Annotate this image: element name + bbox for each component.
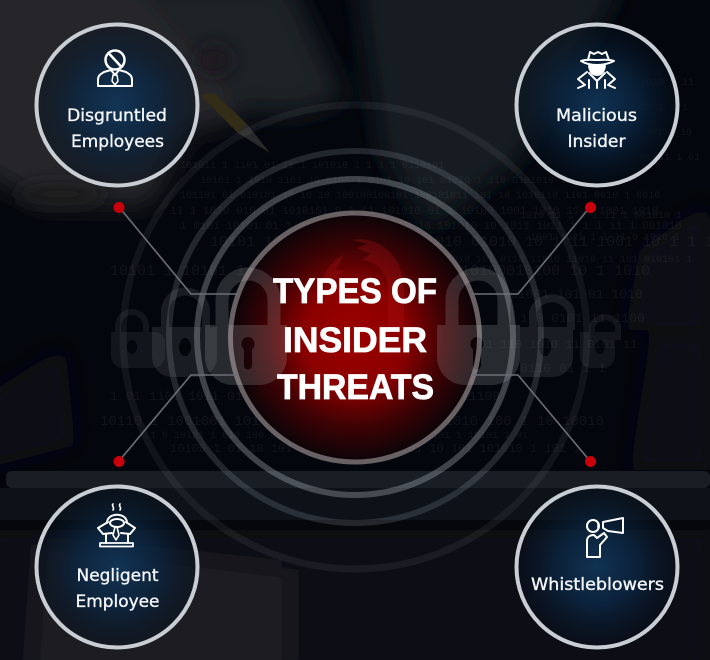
- pencil: [200, 93, 270, 153]
- label: Whistleblowers: [531, 575, 664, 595]
- padlock mid right: [520, 298, 573, 377]
- binary code texture: 1010 11 1 1 1 11 1 001010 1: [520, 211, 682, 222]
- outer padlocks: [111, 292, 618, 377]
- binary code texture: 10100 1 01 10 101 1101 1 1011010101 10 101 101010 1 101 1: [170, 442, 580, 456]
- hand: [15, 45, 232, 206]
- central red disc: [205, 213, 520, 462]
- connector end dots: [114, 202, 596, 467]
- connector lines: [119, 207, 590, 461]
- panel: whistleblowers: [516, 486, 678, 648]
- broken padlock inside disc: [322, 239, 404, 328]
- binary code texture: 0110 01 1 1: [520, 361, 606, 376]
- label: Malicious: [556, 106, 637, 126]
- binary code texture: 1 0 10101 1 010 100 010 101 010100 100 1010 1 0101 1 10101 1 01: [150, 431, 528, 442]
- padlock far right: [580, 317, 618, 368]
- binary code texture: 1 0 0101 11 1100: [520, 311, 645, 326]
- binary code texture: 10101 1 10101 1 1010 0101 1 1 1 1010 1010100010100 10 1 1010: [110, 263, 650, 280]
- label: Negligent: [76, 566, 159, 586]
- connector: whistleblowers: [472, 375, 590, 461]
- label line two: Employees: [71, 132, 164, 152]
- connector: disgruntled employees: [119, 207, 237, 294]
- padlock large right: [437, 274, 520, 385]
- label line two: Insider: [568, 132, 626, 152]
- panel: malicious insider: [516, 24, 678, 186]
- binary code texture: 10110 1 1001001 101 1001 110010 01 0101001010 100 1 10 10010: [100, 414, 604, 430]
- binary code texture: 10101 1 1010 1101 10 0101 1 0101 10 101 01010 1 110 0101010 1: [200, 176, 566, 187]
- connector: malicious insider: [472, 207, 590, 294]
- icon: person with prohibition sign: [98, 50, 132, 86]
- binary code texture: 1 0101 110 1010 11 0101 11: [450, 338, 637, 352]
- binary code texture: 11 1 1010 010 01 1010101 0 1 11 101010 01 1 10100 1001 1010 11 1 1001 1010: [170, 206, 658, 218]
- binary code texture: 01011 1 01: [640, 153, 700, 164]
- binary code texture: 1 01 1 10 10101 1010 101 0110 11010 11010 11 101 010101 1: [350, 255, 692, 266]
- binary code texture: 1 01 1100 1011 01 1 1 1 1001 10 0110101 00 1111100: [110, 389, 500, 404]
- binary code texture: 01001 101 01 1010: [510, 287, 643, 302]
- binary code texture: 0101 10: [650, 128, 692, 139]
- panel: disgruntled employees: [36, 24, 198, 186]
- binary code texture: 101011 1 1101 01 11 1 101010 1 1 1 1 0110101: [180, 161, 444, 172]
- binary code texture: 10 1 1 1: [640, 103, 688, 114]
- connector: negligent employee: [119, 375, 237, 461]
- padlock large left: [205, 274, 287, 385]
- icon: stressed worker at desk with steam: [98, 504, 135, 546]
- binary code texture: 1001 1001 1 1 11 0 1010 1: [530, 233, 680, 244]
- binary code texture: 1010 0 11: [640, 78, 694, 89]
- binary code texture: [100, 78, 710, 456]
- title: TYPES OF: [273, 272, 437, 311]
- title: THREATS: [277, 368, 434, 407]
- binary code texture: 1 0101 10101 01 1 01 010101 00 1010 10 101010 10 1011 1011 1 1 1 11 1 001010: [180, 221, 682, 233]
- icon: person with megaphone: [587, 518, 623, 557]
- tablet edge band: [0, 471, 710, 530]
- padlock far left: [111, 312, 165, 368]
- icon: hooded hacker with hat: [578, 52, 615, 88]
- panel: negligent employee: [36, 486, 198, 648]
- outer decorative rings: [123, 105, 587, 569]
- label line two: Employee: [76, 592, 160, 612]
- binary code texture: 101101 01 010101 10 10 10 100100100101 1 0101011 101 10 1010110 1101 0010 1 0010: [180, 191, 660, 202]
- padlock mid left: [152, 292, 217, 377]
- title: INSIDER: [283, 321, 427, 360]
- title: [273, 272, 437, 407]
- label: Disgruntled: [67, 106, 167, 126]
